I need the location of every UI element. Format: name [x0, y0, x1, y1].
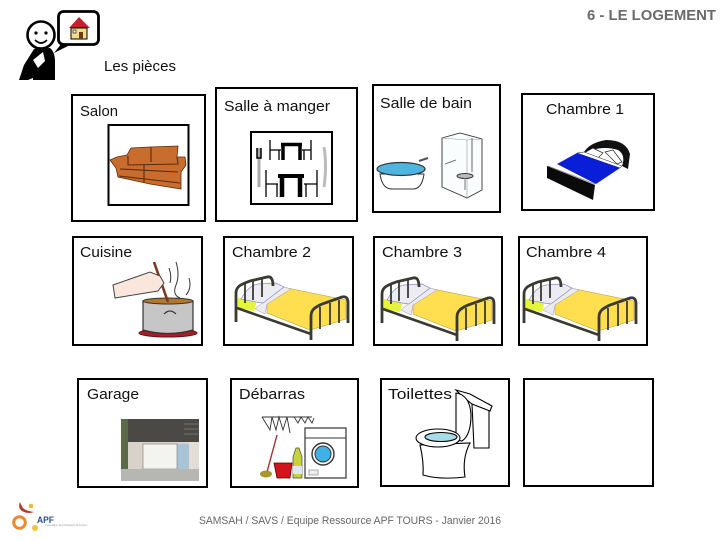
label: chambre 1: Chambre 1 [546, 102, 624, 118]
label: toilettes: Toilettes [388, 387, 452, 403]
icon: drying rack [262, 417, 314, 433]
icon: shower [442, 133, 482, 198]
inner frame with sofa [108, 125, 188, 205]
logo: APF [14, 502, 87, 531]
icon: detergent bottle [293, 448, 302, 478]
label: chambre 3: Chambre 3 [382, 245, 462, 261]
icon: washing machine [305, 428, 346, 478]
footer credit: SAMSAH / SAVS / Equipe Ressource APF TOURS - Janvier 2016 [199, 515, 501, 527]
label: débarras: Débarras [239, 387, 305, 403]
panel: chambre 4 [519, 237, 647, 345]
inner frame with dining tables [251, 132, 332, 204]
label: cuisine: Cuisine [80, 245, 132, 261]
icon: person speaking about a house [19, 12, 98, 80]
title: 6 - LE LOGEMENT [587, 8, 716, 24]
panel: toilettes [381, 379, 509, 486]
panel: chambre 1 [522, 94, 654, 210]
icon: dining tables and cutlery [257, 140, 326, 197]
label: salle de bain: Salle de bain [380, 96, 472, 112]
label: garage: Garage [87, 387, 139, 403]
icon: bathtub [377, 158, 428, 189]
label: chambre 2: Chambre 2 [232, 245, 311, 261]
icon: bed with blue cover [547, 140, 630, 200]
panel: salle à manger [216, 88, 357, 221]
icon: hand stirring a pot [113, 262, 197, 337]
image: garage door [121, 419, 199, 481]
icon: bed with yellow cover [382, 278, 494, 341]
icon: mop [260, 435, 277, 478]
icon: speech bubble with house [54, 12, 98, 53]
panel: empty [524, 379, 653, 486]
icon: red bucket [274, 463, 292, 478]
panel: débarras [231, 379, 358, 487]
label: salon: Salon [80, 104, 118, 120]
panel: salle de bain [373, 85, 500, 212]
panel: salon [72, 95, 205, 221]
label: salle à manger: Salle à manger [224, 99, 330, 115]
panel: chambre 3 [374, 237, 502, 345]
logo: APF: Association des Paralysés de France [45, 523, 87, 527]
logo: APF: APF [37, 515, 54, 525]
panel: chambre 2 [224, 237, 353, 345]
heading: les pièces: Les pièces [104, 59, 176, 75]
icon: sofa [110, 146, 186, 189]
icon: bed with yellow cover [236, 277, 348, 340]
icon: toilet [416, 390, 492, 478]
label: chambre 4: Chambre 4 [526, 245, 606, 261]
panel: garage [78, 379, 207, 487]
icon: bed with yellow cover [524, 278, 636, 341]
panel: cuisine [73, 237, 202, 345]
icon: person [19, 22, 55, 80]
